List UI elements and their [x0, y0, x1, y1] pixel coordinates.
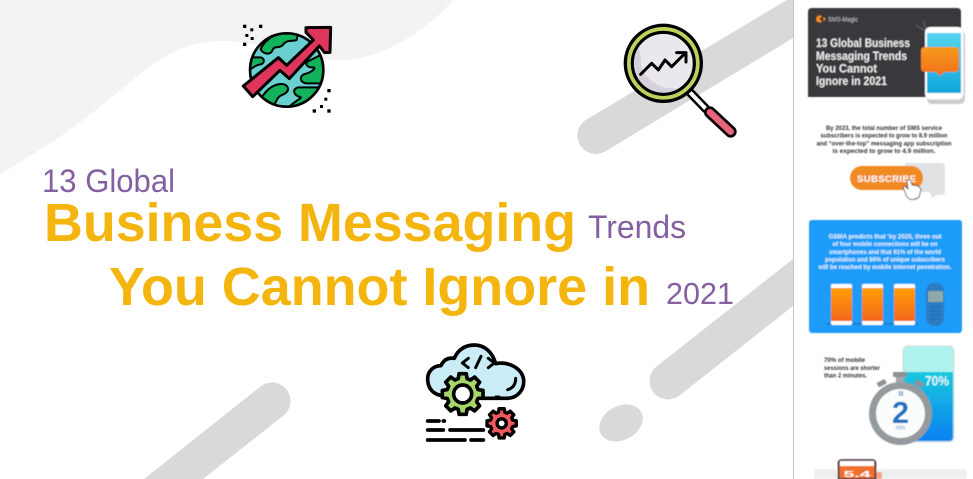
thumbnail heading — [816, 38, 910, 88]
thumbnail panel: subscribers stat — [816, 125, 952, 200]
background stripe: middle right — [649, 259, 793, 400]
GSMA text: will be reached by mobile internet penetration. — [818, 264, 952, 271]
icon: smartphone 2 — [862, 284, 883, 325]
phone shadow — [826, 323, 918, 325]
GSMA text: GSMA predicts that ‘by 2025, three out — [828, 234, 942, 240]
thumbnail heading: Ignore in 2021 — [816, 76, 888, 88]
GSMA text: of four mobile connections will be on — [832, 241, 938, 248]
logo: SMS-Magic — [828, 16, 859, 24]
thumbnail panel: dark header — [808, 8, 965, 104]
stat text: 70% of mobile — [824, 357, 865, 364]
icon: feature phone — [926, 283, 944, 326]
sidebar divider — [793, 0, 794, 479]
background blob: top-left wave — [0, 0, 453, 175]
icon: cloud code with gears — [428, 345, 524, 440]
thumbnail heading: Messaging Trends — [816, 51, 907, 63]
stat text: By 2023, the total number of SMS service — [826, 125, 942, 132]
stopwatch: min — [896, 426, 905, 432]
stat text: is expected to grow to 4.9 million. — [832, 148, 936, 155]
icon: smartphone with orange bubble — [921, 27, 965, 104]
stopwatch — [869, 372, 932, 445]
background stripe: upper right — [577, 0, 793, 154]
fill gauge: 70% — [925, 372, 949, 388]
title block — [42, 163, 734, 317]
thumbnail panel: 70% sessions stat — [824, 346, 954, 445]
stat text: sessions are shorter — [824, 365, 880, 372]
icon: hand cursor — [903, 180, 921, 200]
stat text — [816, 125, 952, 155]
title: Trends: Trends — [588, 209, 686, 245]
thumbnail panel: blue GSMA card — [809, 220, 962, 333]
stat text: subscribers is expected to grow to 8.9 million — [820, 132, 948, 140]
GSMA text — [818, 234, 952, 271]
thumbnail heading: You Cannot — [816, 64, 877, 76]
subscribe button: SUBSCRIBE — [857, 174, 916, 185]
stat text: and “over-the-top” messaging app subscription — [816, 140, 952, 148]
title: 13 Global: 13 Global — [42, 163, 175, 199]
thumbnail panel: bottom card: 5.4 — [844, 470, 872, 479]
icon: magnifying glass with trend line — [625, 25, 731, 132]
title: 2021: 2021 — [666, 276, 734, 311]
stat text — [824, 357, 880, 380]
title: Business Messaging: Business Messaging — [44, 193, 576, 253]
decorative ray marks near phone — [916, 21, 926, 31]
thumbnail panel: bottom card — [814, 460, 967, 479]
icon: smartphone 3 — [894, 284, 915, 325]
speech bubble behind button — [905, 163, 945, 198]
sidebar: infographic thumbnail preview — [808, 8, 967, 479]
title: You Cannot Ignore in: You Cannot Ignore in — [109, 257, 650, 317]
GSMA text: smartphones and that 61% of the world — [829, 249, 941, 256]
background dot — [593, 397, 649, 449]
icon: smartphone 1 — [831, 284, 852, 325]
stat text: than 2 minutes. — [824, 372, 867, 380]
GSMA text: population and 86% of unique subscribers — [825, 256, 945, 264]
icon: globe with rising arrow — [243, 25, 331, 113]
background stripe: bottom — [144, 382, 291, 479]
thumbnail heading: 13 Global Business — [816, 38, 910, 50]
logo — [816, 15, 859, 24]
stopwatch: 2 — [892, 395, 909, 430]
